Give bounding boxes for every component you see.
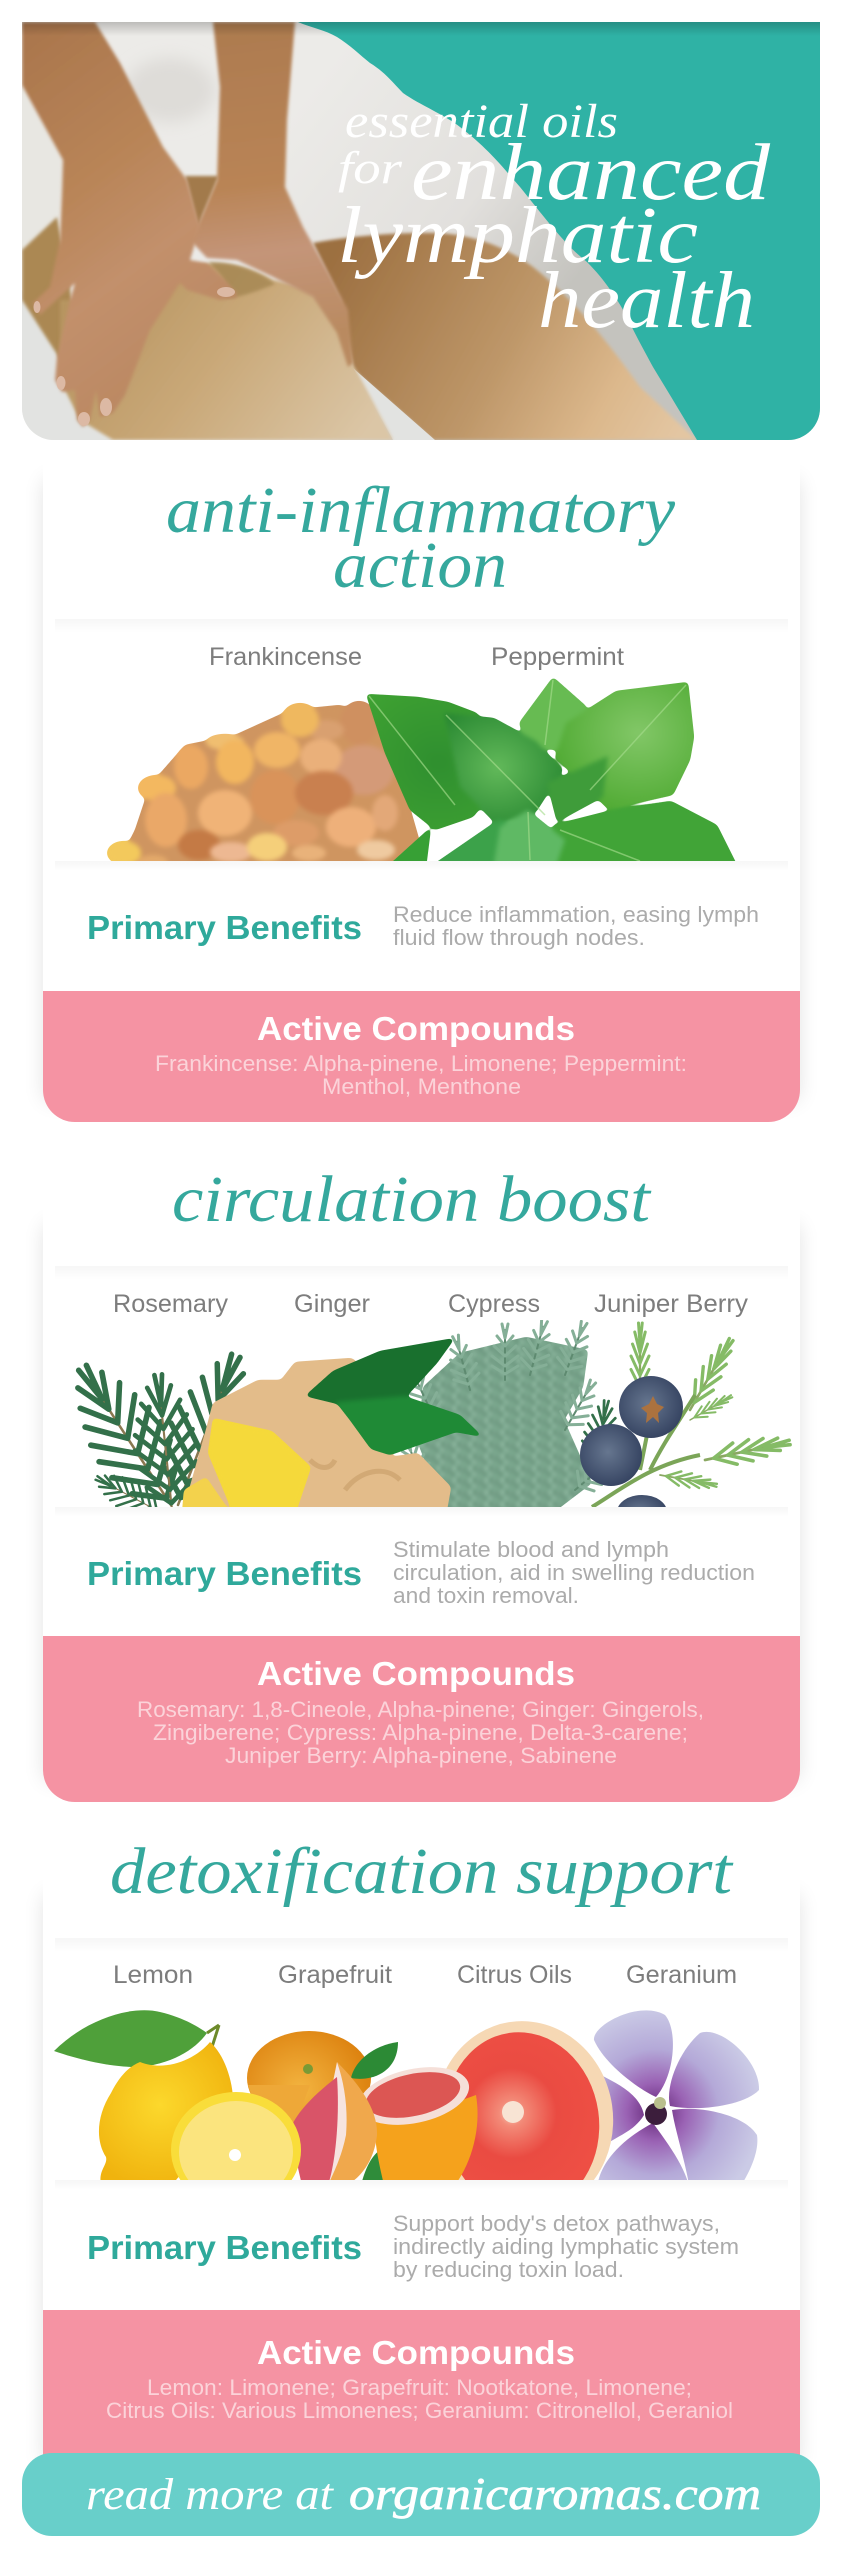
hero photo: gap between arms bbox=[185, 176, 219, 230]
card side shadow bbox=[45, 1225, 798, 1780]
primary benefits: fluid flow through nodes. bbox=[393, 925, 645, 950]
grapefruit wedge bbox=[292, 2062, 377, 2185]
card background bbox=[43, 1876, 800, 2476]
primary benefits: Primary Benefits bbox=[87, 1555, 362, 1592]
frankincense resin pile bbox=[107, 701, 425, 875]
heading: anti-inflammatory bbox=[166, 474, 676, 547]
primary benefits: circulation, aid in swelling reduction bbox=[393, 1560, 755, 1585]
grapefruit half bbox=[363, 2067, 478, 2180]
illustration: rosemary, ginger, cypress, juniper bbox=[75, 1320, 792, 1507]
primary benefits bbox=[87, 1537, 755, 1608]
active compounds: Citrus Oils: Various Limonenes; Geranium: Citronellol, Geraniol bbox=[106, 2398, 733, 2423]
orange bbox=[247, 2031, 403, 2185]
ginger slices bbox=[182, 1418, 311, 1515]
hero panel bbox=[22, 22, 820, 440]
primary benefits: by reducing toxin load. bbox=[393, 2257, 624, 2282]
whole lemon bbox=[99, 2042, 233, 2185]
heading: detoxification support bbox=[110, 1835, 734, 1908]
card background bbox=[43, 456, 800, 1122]
active compounds: Lemon: Limonene; Grapefruit: Nootkatone, Limonene; bbox=[147, 2375, 692, 2400]
primary benefits: Support body's detox pathways, bbox=[393, 2211, 720, 2236]
card side shadow bbox=[45, 1895, 798, 2465]
ginger root bbox=[182, 1358, 451, 1515]
primary benefits bbox=[87, 2211, 739, 2282]
hero photo: front leg bbox=[60, 264, 393, 440]
oil labels bbox=[209, 643, 624, 671]
oil labels: Lemon bbox=[113, 1961, 193, 1989]
panel: detoxification support bbox=[43, 1835, 800, 2476]
footer banner: read more at bbox=[86, 2470, 335, 2519]
hero photo: back leg bbox=[313, 233, 697, 440]
hero title: lymphatic bbox=[337, 192, 698, 280]
card side shadow bbox=[45, 480, 798, 1100]
heading: action bbox=[333, 529, 507, 602]
cypress bbox=[400, 1320, 604, 1507]
active compounds: Active Compounds bbox=[257, 1655, 575, 1692]
primary benefits bbox=[87, 902, 759, 950]
panel: anti-inflammatory action bbox=[43, 456, 800, 1122]
panel: circulation boost bbox=[43, 1163, 800, 1802]
active compounds: Juniper Berry: Alpha-pinene, Sabinene bbox=[225, 1743, 617, 1768]
hero title: health bbox=[538, 257, 755, 345]
footer banner: organicaromas.com bbox=[349, 2468, 761, 2519]
active compounds: Zingiberene; Cypress: Alpha-pinene, Delta-3-carene; bbox=[153, 1720, 688, 1745]
hero photo: near hand and forearm bbox=[22, 22, 237, 427]
active compounds: Menthol, Menthone bbox=[322, 1074, 521, 1099]
ginger leaves bbox=[305, 1338, 483, 1455]
footer banner bbox=[22, 2453, 820, 2536]
active compounds bbox=[43, 1636, 800, 1802]
active compounds bbox=[43, 2310, 800, 2476]
juniper sprigs bbox=[577, 1323, 792, 1507]
lemon half bbox=[171, 2092, 301, 2180]
oil labels: Peppermint bbox=[491, 643, 624, 671]
primary benefits: indirectly aiding lymphatic system bbox=[393, 2234, 739, 2259]
hero photo: far hand and forearm bbox=[190, 22, 353, 367]
hero photo: towel under front leg bbox=[22, 290, 435, 440]
primary benefits: Primary Benefits bbox=[87, 2229, 362, 2266]
hero photo: towel fold between arms bbox=[130, 59, 214, 121]
active compounds: Active Compounds bbox=[257, 2334, 575, 2371]
heading: circulation boost bbox=[172, 1163, 652, 1236]
card background bbox=[43, 1205, 800, 1802]
hero title: enhanced bbox=[411, 129, 771, 217]
oil labels: Ginger bbox=[294, 1290, 370, 1318]
rosemary bbox=[75, 1351, 246, 1507]
hero photo: left towel bbox=[22, 85, 63, 260]
oil labels: Geranium bbox=[626, 1961, 737, 1989]
oil labels: Juniper Berry bbox=[594, 1290, 749, 1318]
oil labels: Frankincense bbox=[209, 643, 362, 671]
primary benefits: Primary Benefits bbox=[87, 909, 362, 946]
illustration: frankincense and peppermint bbox=[107, 677, 742, 875]
hero top shading bbox=[22, 22, 820, 34]
hero photo: finger details bbox=[34, 287, 235, 426]
peppermint leaves bbox=[366, 677, 742, 875]
peppermint veins bbox=[369, 680, 686, 861]
geranium flower bbox=[594, 2010, 759, 2190]
oil labels: Citrus Oils bbox=[457, 1961, 572, 1989]
illustration: citrus and geranium bbox=[54, 2010, 759, 2180]
active compounds bbox=[43, 991, 800, 1122]
hero photo: front leg upper dimple bbox=[208, 262, 275, 298]
oil labels: Grapefruit bbox=[278, 1961, 392, 1989]
oil labels: Cypress bbox=[448, 1290, 540, 1318]
primary benefits: Stimulate blood and lymph bbox=[393, 1537, 669, 1562]
oil labels bbox=[113, 1290, 749, 1318]
active compounds: Rosemary: 1,8-Cineole, Alpha-pinene; Ginger: Gingerols, bbox=[137, 1697, 704, 1722]
primary benefits: Reduce inflammation, easing lymph bbox=[393, 902, 759, 927]
active compounds: Frankincense: Alpha-pinene, Limonene; Peppermint: bbox=[155, 1051, 687, 1076]
red grapefruit slice bbox=[446, 2021, 614, 2180]
juniper berries bbox=[580, 1376, 683, 1507]
heading bbox=[166, 474, 676, 602]
hero title bbox=[337, 95, 771, 345]
oil labels bbox=[113, 1961, 737, 1989]
hero photo: towel background bbox=[22, 22, 820, 440]
primary benefits: and toxin removal. bbox=[393, 1583, 579, 1608]
hero photo: shaded left leg bbox=[22, 217, 72, 362]
hero title: essential oils bbox=[345, 95, 618, 148]
active compounds: Active Compounds bbox=[257, 1010, 575, 1047]
oil labels: Rosemary bbox=[113, 1290, 228, 1318]
lemon leaf bbox=[54, 2010, 219, 2067]
hero teal sweep bbox=[298, 22, 820, 440]
hero title: for bbox=[338, 142, 403, 193]
